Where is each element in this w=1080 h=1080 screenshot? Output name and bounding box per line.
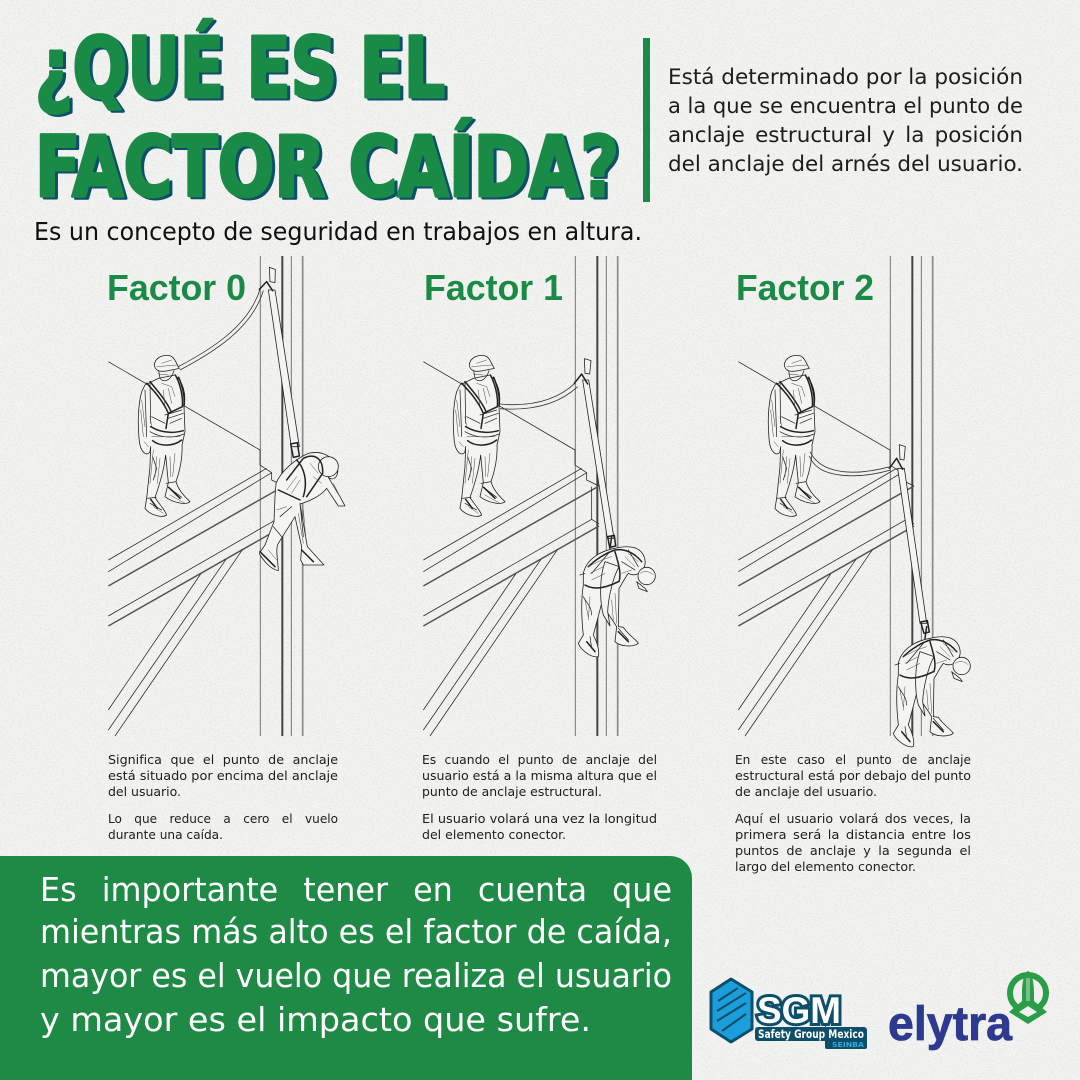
- factor 1 description: [422, 752, 657, 842]
- SGM tag band: Safety Group Mexico: [758, 1027, 864, 1041]
- factor 2 heading: Factor 2: [736, 267, 874, 308]
- SGM wordmark: SGM: [757, 990, 841, 1031]
- factor 1 description: del elemento conector.: [422, 827, 566, 842]
- panel: factor 0: [107, 256, 345, 842]
- icon: blue hexagon: [711, 979, 752, 1042]
- intro text block: a la que se encuentra el punto de: [668, 94, 1023, 118]
- logo: elytra: elytra: [888, 998, 1012, 1051]
- panel: factor 1: [422, 256, 657, 842]
- factor 1 description: usuario está a la misma altura que el: [422, 768, 657, 783]
- factor 2 description: En este caso el punto de anclaje: [735, 752, 971, 767]
- callout: green importance box: mayor es el vuelo que realiza el usuario: [40, 956, 672, 995]
- factor 0 description: Significa que el punto de anclaje: [108, 752, 338, 767]
- factor 2 description: Aquí el usuario volará dos veces, la: [735, 811, 971, 826]
- factor 1 illustration: [423, 256, 655, 736]
- logo: SGM: [711, 979, 867, 1049]
- factor 0 description: durante una caída.: [108, 827, 223, 842]
- factor 0 description: está situado por encima del anclaje: [108, 768, 338, 783]
- SGM tag band: [755, 1027, 867, 1049]
- SGM tag band: SEINBA: [832, 1041, 864, 1049]
- factor 2 description: primera será la distancia entre los: [735, 827, 971, 842]
- intro text block: del anclaje del arnés del usuario.: [668, 152, 1023, 176]
- factor 2 description: de anclaje del usuario.: [735, 784, 877, 799]
- subtitle: Es un concepto de seguridad en trabajos en altura.: [34, 217, 642, 246]
- factor 0 description: [108, 752, 338, 842]
- factor 0 illustration: [108, 256, 345, 736]
- factor 1 description: punto de anclaje estructural.: [422, 784, 602, 799]
- factor 0 heading: Factor 0: [107, 267, 246, 308]
- factor 2 description: puntos de anclaje y la segunda el: [735, 843, 971, 858]
- logo: elytra: [888, 971, 1047, 1051]
- factor 1 description: Es cuando el punto de anclaje del: [422, 752, 657, 767]
- icon: green wheel: [1009, 971, 1047, 1024]
- factor 2 illustration: [738, 256, 970, 747]
- factor 2 description: estructural está por debajo del punto: [735, 768, 971, 783]
- callout: green importance box: mientras más alto es el factor de caída,: [40, 912, 672, 951]
- vertical divider bar: [643, 38, 650, 202]
- intro text block: [668, 65, 1023, 176]
- title: [35, 19, 619, 216]
- title: FACTOR CAÍDA?: [35, 118, 619, 216]
- factor 2 description: largo del elemento conector.: [735, 859, 916, 874]
- intro text block: anclaje estructural y la posición: [668, 123, 1023, 147]
- factor 2 description: [735, 752, 971, 874]
- intro text block: Está determinado por la posición: [668, 65, 1023, 89]
- factor 1 description: El usuario volará una vez la longitud: [422, 811, 657, 826]
- callout: green importance box: Es importante tener en cuenta que: [40, 870, 672, 909]
- factor 0 description: del usuario.: [108, 784, 181, 799]
- panel: factor 2: [735, 256, 971, 874]
- callout: green importance box: y mayor es el impacto que sufre.: [40, 1000, 591, 1039]
- factor 1 heading: Factor 1: [424, 267, 563, 308]
- factor 0 description: Lo que reduce a cero el vuelo: [108, 811, 338, 826]
- callout: green importance box: [0, 856, 692, 1080]
- title: ¿QUÉ ES EL: [35, 19, 445, 117]
